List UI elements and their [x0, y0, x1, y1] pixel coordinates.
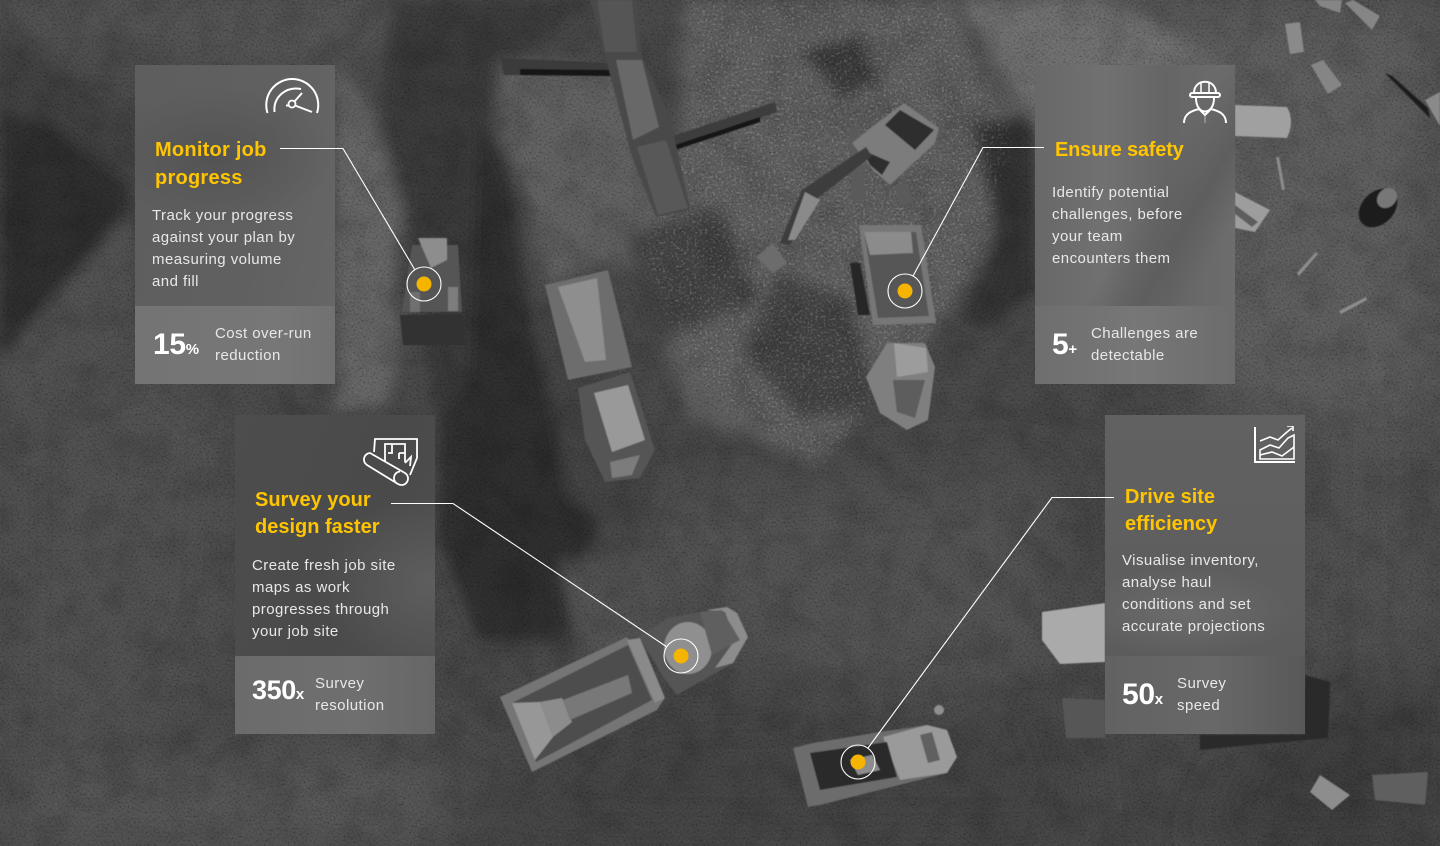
heading: Survey your [255, 489, 371, 511]
dump truck left centre [545, 270, 655, 482]
sand bank [498, 60, 670, 285]
body text [152, 207, 295, 290]
body text [252, 557, 396, 640]
worker on the ground [934, 705, 944, 715]
heading: Ensure safety [1055, 139, 1184, 161]
bottom dump truck [500, 607, 748, 772]
panel: survey your design faster [235, 415, 435, 734]
stat: 5+: 5+ [1052, 328, 1077, 361]
heading: Monitor job [155, 139, 267, 161]
stat: 350x [252, 675, 385, 714]
bulldozer top-left [400, 238, 465, 345]
stat: 5+: Challenges are [1091, 325, 1198, 342]
stat: 15%: Cost over-run [215, 325, 312, 342]
heading: Drive site [1125, 486, 1215, 508]
heading [1125, 486, 1218, 535]
heading: progress [155, 166, 243, 188]
body text: encounters them [1052, 250, 1170, 267]
site machines [400, 0, 1440, 810]
stat: 15% [153, 325, 312, 364]
screening plant and conveyors [501, 0, 777, 217]
body text: your job site [252, 623, 339, 640]
body text: Visualise inventory, [1122, 552, 1259, 569]
body text: conditions and set [1122, 596, 1251, 613]
body text: Track your progress [152, 207, 293, 224]
bottom right dozer [793, 725, 957, 807]
dark track [380, 0, 590, 420]
heading: efficiency [1125, 513, 1217, 535]
sand right of first panel [335, 65, 402, 410]
body text: maps as work [252, 579, 350, 596]
body text: against your plan by [152, 229, 295, 246]
dump truck right centre [850, 225, 936, 430]
marker: drive site efficiency [841, 498, 1114, 779]
body text: Identify potential [1052, 184, 1169, 201]
icon: speedometer gauge [265, 78, 320, 114]
body text: challenges, before [1052, 206, 1183, 223]
stat: 5+ [1052, 325, 1198, 364]
stat: 15%: reduction [215, 347, 281, 364]
icon: worker with hard hat [1183, 80, 1227, 123]
stat: 350x: resolution [315, 697, 385, 714]
body text: progresses through [252, 601, 389, 618]
body text: analyse haul [1122, 574, 1212, 591]
panel: ensure safety [1035, 65, 1235, 384]
body text [1122, 552, 1265, 635]
heading [155, 139, 267, 188]
excavator [756, 103, 939, 273]
stat: 50x: 50x [1122, 678, 1163, 711]
body text: measuring volume [152, 251, 282, 268]
body text: accurate projections [1122, 618, 1265, 635]
stat: 50x: Survey [1177, 675, 1226, 692]
marker: survey your design faster [391, 504, 698, 673]
stat: 350x: Survey [315, 675, 364, 692]
stat: 15%: 15% [153, 328, 199, 361]
pipes and site materials [1235, 0, 1440, 810]
panel: drive site efficiency [1105, 415, 1305, 734]
dark mound left [0, 110, 130, 365]
body text [1052, 184, 1183, 267]
body text: your team [1052, 228, 1123, 245]
light road top right [960, 0, 1215, 130]
stat: 50x [1122, 675, 1226, 714]
panel: monitor job progress [135, 65, 335, 384]
stat: 5+: detectable [1091, 347, 1165, 364]
marker: ensure safety [888, 148, 1044, 308]
heading [255, 489, 380, 538]
heading: design faster [255, 516, 379, 538]
icon: rolled plans [363, 438, 418, 486]
body text: and fill [152, 273, 199, 290]
icon: rising area chart [1254, 426, 1295, 463]
gravel area [640, 0, 1010, 460]
body text: Create fresh job site [252, 557, 396, 574]
marker: monitor job progress [280, 148, 441, 301]
stat: 50x: speed [1177, 697, 1220, 714]
stat: 350x: 350x [252, 675, 304, 705]
truck and plant behind panel 4 [1042, 603, 1330, 750]
